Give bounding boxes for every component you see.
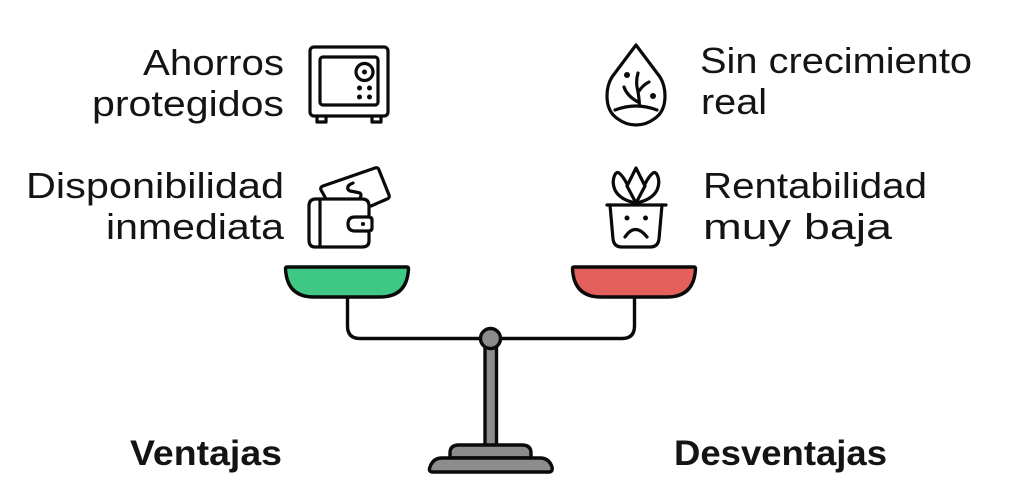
text: Ahorros protegidos [92,42,284,124]
text: Rentabilidad muy baja [703,165,927,247]
text: Ahorros protegidos: Ahorros [143,42,284,83]
text: Disponibilidad inmediata [26,165,285,247]
label: Ventajas: Ventajas [130,434,282,473]
text: Sin crecimiento real: real [701,81,767,122]
text: Rentabilidad muy baja: muy baja [703,206,893,247]
base top [450,445,531,458]
balance scale [286,267,696,472]
green pan [286,267,408,297]
base bottom [429,458,552,472]
text: Sin crecimiento real [700,40,972,122]
red pan [572,267,696,297]
icon: water drop with dry tree [607,45,665,125]
text: Disponibilidad inmediata: inmediata [106,206,285,247]
icon: safe [310,47,388,122]
text: Disponibilidad inmediata: Disponibilidad [26,165,284,206]
icon: sad potted plant [607,168,666,247]
scale beam [348,297,634,338]
label: Desventajas: Desventajas [674,434,887,473]
icon: wallet with banknote [309,168,389,247]
column [485,346,496,446]
text: Ahorros protegidos: protegidos [92,83,284,124]
text: Sin crecimiento real: Sin crecimiento [700,40,972,81]
text: Rentabilidad muy baja: Rentabilidad [703,165,927,206]
pivot [480,328,500,348]
